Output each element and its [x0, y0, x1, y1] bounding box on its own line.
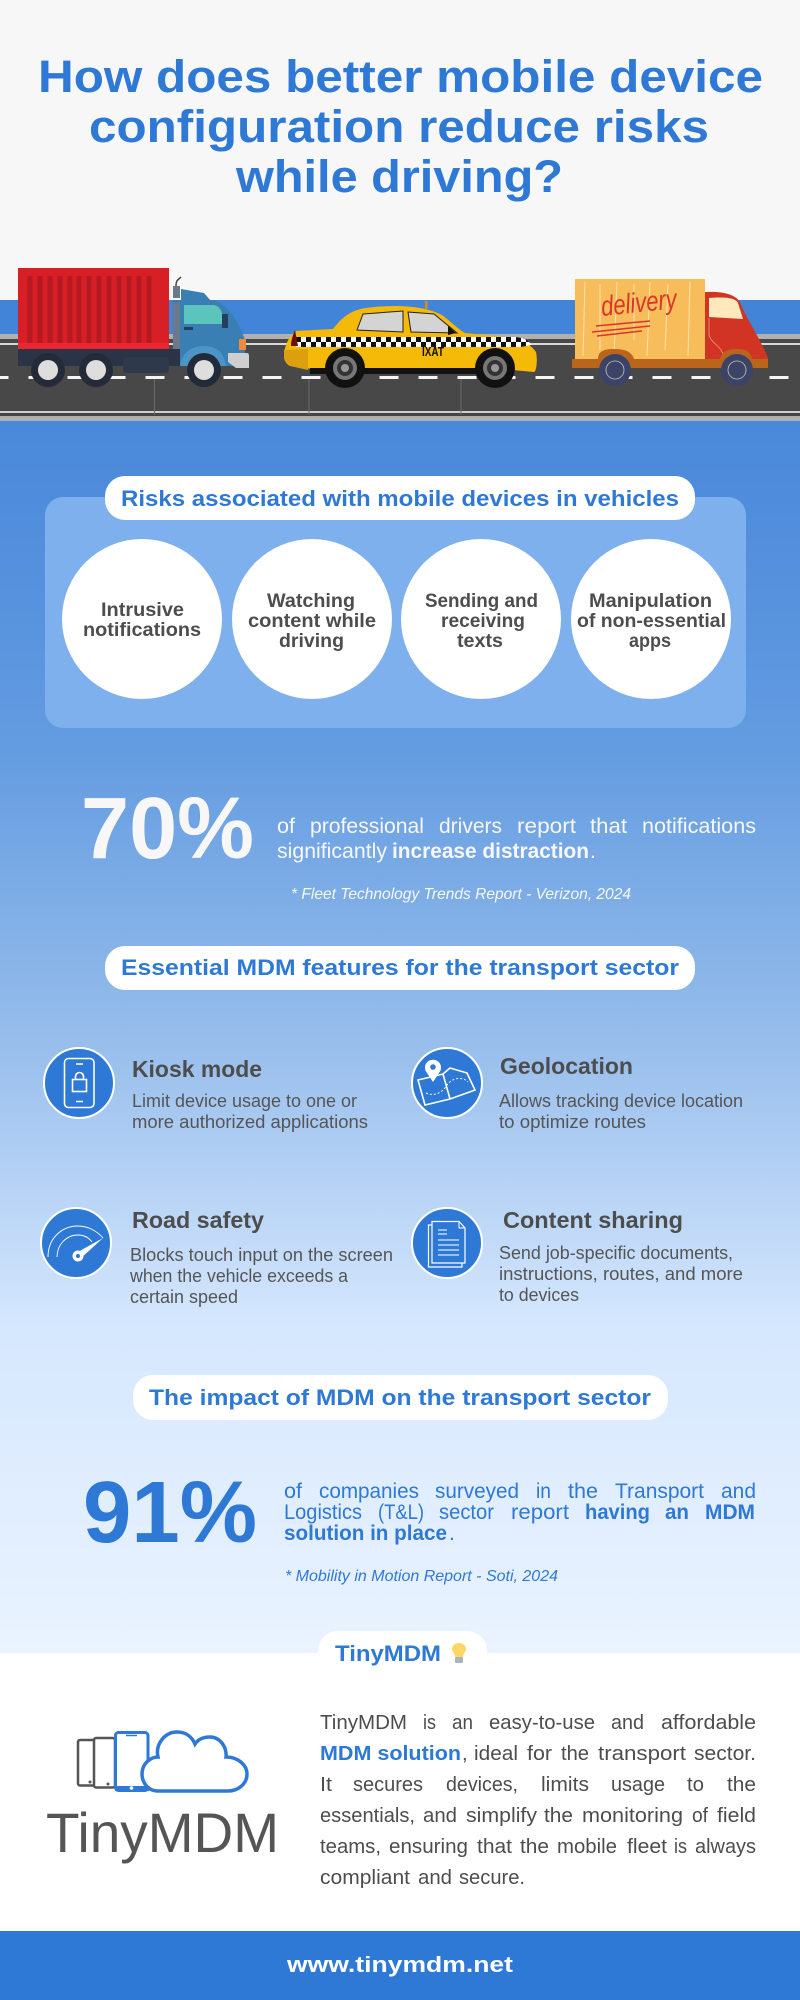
about text: TinyMDM	[320, 1712, 407, 1734]
about text: for	[527, 1743, 552, 1765]
title: configuration reduce risks	[89, 101, 709, 152]
about text: field	[717, 1805, 756, 1827]
stat text: companies: of	[284, 1480, 302, 1503]
stat text: companies: Transport	[615, 1480, 704, 1503]
risk: manipulation of apps: Manipulation	[589, 591, 712, 612]
about text: an	[452, 1712, 473, 1734]
feature: content sharing: to devices	[499, 1285, 579, 1305]
risk: watching content: content while	[248, 611, 376, 632]
stat text: notifications: that	[590, 815, 627, 838]
heading pill: risks	[105, 476, 695, 520]
truck: container lorry	[18, 268, 249, 387]
taxi: IXAT	[422, 344, 444, 359]
gradient background panel	[0, 421, 800, 1653]
risk: sending texts: texts	[457, 631, 503, 652]
risk: sending texts	[401, 539, 561, 699]
about text: ensuring	[389, 1836, 468, 1858]
risk: manipulation of apps: of non-essential	[577, 611, 726, 632]
stat text: companies: sector	[439, 1501, 494, 1524]
feature: content sharing: Send job-specific documents,	[499, 1243, 733, 1263]
feature: road safety: Road safety	[132, 1207, 264, 1233]
stat text: notifications: report	[517, 815, 576, 838]
feature: geolocation: Allows tracking device location	[499, 1091, 743, 1111]
stat text: companies: MDM	[705, 1501, 755, 1524]
stat text: companies: surveyed	[435, 1480, 519, 1503]
about text: usage	[611, 1774, 665, 1796]
about text: essentials,	[320, 1805, 415, 1827]
about text: always	[695, 1836, 756, 1858]
citation: Soti: * Mobility in Motion Report - Soti, 2024	[285, 1568, 558, 1585]
icon: speedometer	[41, 1208, 111, 1278]
about text: the	[544, 1805, 573, 1827]
about text: affordable	[661, 1712, 756, 1734]
title: while driving?	[235, 151, 563, 202]
title	[38, 51, 763, 202]
feature: content sharing: Content sharing	[503, 1207, 683, 1233]
risk: intrusive notifications: Intrusive	[101, 600, 184, 621]
icon: map with pin	[412, 1048, 482, 1118]
stat text: companies: .	[449, 1522, 455, 1545]
about text: secures	[353, 1774, 423, 1796]
about text: the	[520, 1836, 549, 1858]
citation: Verizon: * Fleet Technology Trends Report - Verizon, 2024	[291, 886, 631, 903]
heading pill: impact	[133, 1375, 668, 1420]
feature: kiosk mode	[44, 1048, 368, 1132]
icon: light bulb	[452, 1643, 466, 1663]
feature: road safety: when the vehicle exceeds a	[129, 1266, 349, 1286]
stat text: companies: Logistics	[284, 1501, 362, 1524]
title: How does better mobile device	[38, 51, 763, 102]
about text: simplify	[466, 1805, 537, 1827]
about text: sector.	[694, 1743, 756, 1765]
taxi	[284, 301, 537, 388]
about text: and	[423, 1805, 457, 1827]
about text: mobile	[557, 1836, 617, 1858]
about text: ideal	[474, 1743, 518, 1765]
footer bar	[0, 1931, 800, 2000]
about text: and	[418, 1867, 452, 1889]
icon: phone with lock	[44, 1048, 114, 1118]
logo: TinyMDM	[46, 1732, 279, 1864]
heading pill: MDM features: Essential MDM features for the transport sector	[121, 955, 679, 980]
about text: fleet	[627, 1836, 667, 1858]
about text: ,	[462, 1743, 468, 1765]
about text: transport	[598, 1743, 686, 1765]
feature: geolocation	[412, 1048, 743, 1132]
heading pill: impact: The impact of MDM on the transport sector	[149, 1385, 651, 1410]
stat text: notifications: notifications	[642, 815, 756, 838]
stat text: notifications: professional	[310, 815, 424, 838]
stat text: companies: (T&L)	[378, 1501, 424, 1524]
risk: watching content: Watching	[267, 591, 355, 612]
feature: kiosk mode: Limit device usage to one or	[132, 1091, 357, 1111]
stat text: companies: having	[585, 1501, 650, 1524]
stat: 91%: 91%	[83, 1464, 257, 1561]
risk: manipulation of apps	[571, 539, 731, 699]
about text: easy-to-use	[489, 1712, 595, 1734]
about text: the	[561, 1743, 589, 1765]
stat text: companies: the	[568, 1480, 598, 1503]
feature: road safety	[41, 1207, 393, 1307]
stat text: companies: an	[665, 1501, 689, 1524]
feature: content sharing	[412, 1207, 743, 1305]
feature: kiosk mode: Kiosk mode	[132, 1056, 262, 1082]
risk: intrusive notifications	[62, 539, 222, 699]
feature: road safety: certain speed	[130, 1287, 238, 1307]
about text: monitoring	[582, 1805, 683, 1827]
about text: to	[687, 1774, 704, 1796]
stat: 91%	[83, 1464, 756, 1585]
about text: of	[692, 1805, 708, 1827]
stat: 70%	[81, 780, 756, 903]
about text: MDM solution	[320, 1743, 461, 1765]
about text: It	[320, 1774, 332, 1796]
stat: 70%: 70%	[81, 780, 254, 877]
feature: road safety: Blocks touch input on the screen	[130, 1245, 393, 1265]
stat text: notifications: increase distraction	[392, 840, 589, 863]
panel: risks	[45, 476, 746, 728]
about text: and	[611, 1712, 644, 1734]
stat text: companies: companies	[319, 1480, 419, 1503]
about text: limits	[541, 1774, 589, 1796]
heading pill: MDM features	[105, 946, 695, 990]
feature: geolocation: Geolocation	[500, 1053, 633, 1079]
delivery truck: delivery	[599, 283, 680, 322]
about text: is	[674, 1836, 687, 1858]
about text: is	[423, 1712, 436, 1734]
risk: intrusive notifications: notifications	[83, 620, 201, 641]
delivery truck	[572, 279, 768, 386]
about text: that	[477, 1836, 512, 1858]
about text: teams,	[320, 1836, 381, 1858]
risk: sending texts: receiving	[441, 611, 525, 632]
panel: TinyMDM about	[0, 1631, 800, 1931]
stat text: notifications: of	[277, 815, 295, 838]
stat text: notifications: significantly	[277, 840, 387, 863]
about text: compliant	[320, 1867, 410, 1889]
feature: geolocation: to optimize routes	[499, 1112, 646, 1132]
stat text: companies: solution in place	[284, 1522, 447, 1545]
stat text: companies: report	[511, 1501, 569, 1524]
risk: sending texts: Sending and	[425, 591, 538, 612]
feature: kiosk mode: more authorized applications	[132, 1112, 368, 1132]
feature: content sharing: instructions, routes, and more	[499, 1264, 743, 1284]
about text: the	[727, 1774, 756, 1796]
risk: watching content	[232, 539, 392, 699]
stat text: companies: and	[721, 1480, 756, 1503]
tab heading: TinyMDM	[318, 1631, 487, 1666]
stat text: notifications: drivers	[439, 815, 502, 838]
risk: watching content: driving	[279, 631, 344, 652]
icon: documents	[412, 1208, 482, 1278]
road scene illustration	[0, 268, 800, 421]
logo: TinyMDM: TinyMDM	[46, 1801, 279, 1864]
about text: secure.	[459, 1867, 525, 1889]
risk: manipulation of apps: apps	[629, 631, 671, 652]
heading pill: risks: Risks associated with mobile devices in vehicles	[121, 486, 679, 511]
about text: devices,	[446, 1774, 518, 1796]
tab heading: TinyMDM: TinyMDM	[335, 1641, 441, 1666]
stat text: companies: in	[536, 1480, 551, 1503]
footer bar: www.tinymdm.net	[286, 1952, 514, 1977]
stat text: notifications: .	[590, 840, 596, 863]
